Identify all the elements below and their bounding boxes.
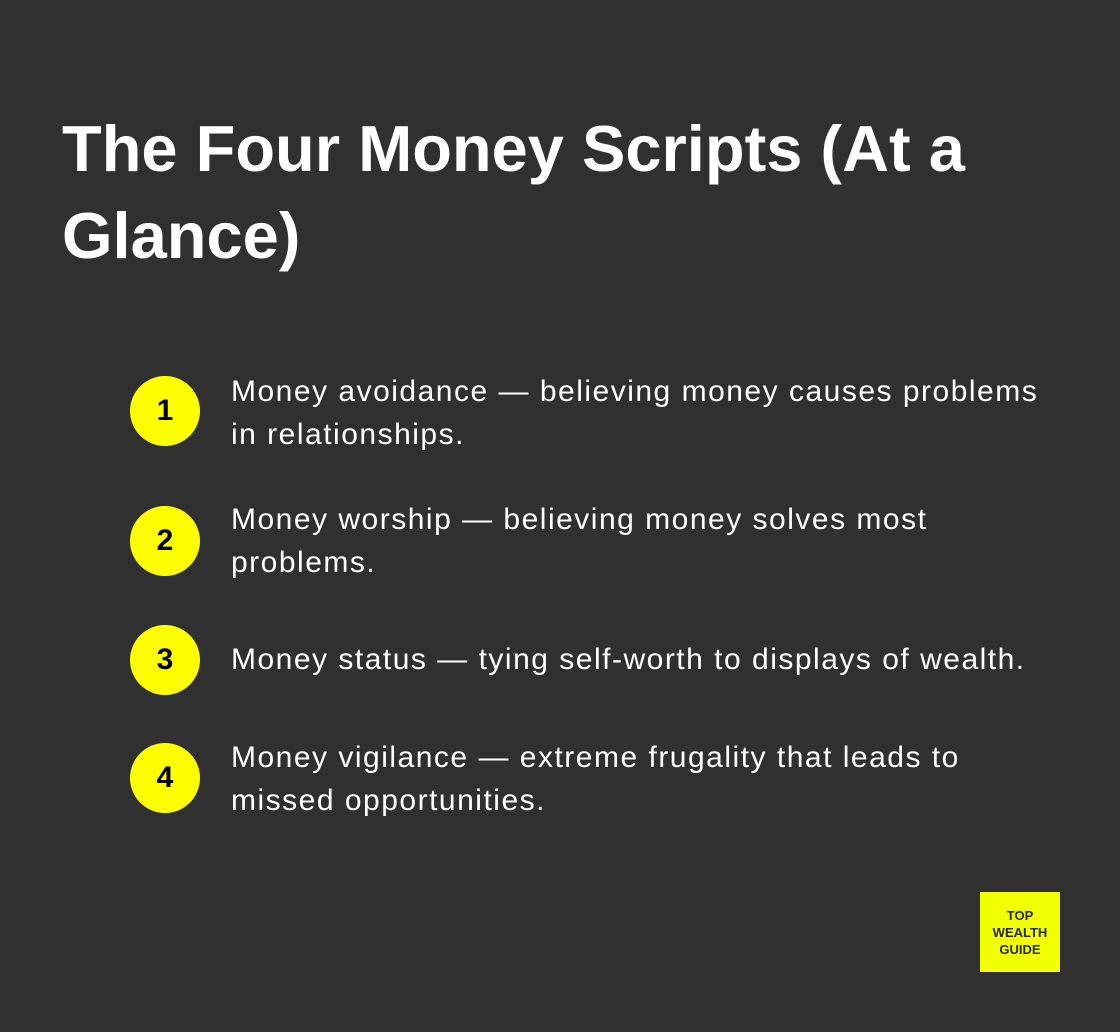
number badge 3 bbox=[130, 625, 200, 695]
number badge 2 bbox=[130, 506, 200, 576]
logo: Top Wealth Guide: WEALTH bbox=[993, 925, 1047, 940]
title bbox=[62, 112, 966, 272]
text 2: problems. bbox=[231, 546, 376, 579]
logo: Top Wealth Guide bbox=[980, 892, 1060, 972]
logo: Top Wealth Guide: TOP bbox=[1007, 908, 1033, 923]
number badge 4: 4 bbox=[157, 761, 173, 794]
text 2: Money worship — believing money solves most bbox=[231, 503, 927, 536]
title: The Four Money Scripts (At a bbox=[62, 112, 965, 185]
text 4: missed opportunities. bbox=[231, 784, 546, 817]
text 1: in relationships. bbox=[231, 418, 465, 451]
title: Glance) bbox=[62, 199, 300, 272]
number badge 1 bbox=[130, 376, 200, 446]
text 4: Money vigilance — extreme frugality that leads to bbox=[231, 741, 960, 774]
text 2 bbox=[231, 503, 927, 579]
item 4 bbox=[130, 741, 960, 817]
number badge 4 bbox=[130, 743, 200, 813]
number badge 1: 1 bbox=[157, 394, 173, 427]
list bbox=[130, 375, 1038, 817]
item 1 bbox=[130, 375, 1038, 451]
text 4 bbox=[231, 741, 960, 817]
text 1 bbox=[231, 375, 1038, 451]
item 2 bbox=[130, 503, 927, 579]
text 3: Money status — tying self-worth to displays of wealth. bbox=[231, 643, 1026, 676]
number badge 2: 2 bbox=[157, 524, 173, 557]
number badge 3: 3 bbox=[157, 643, 173, 676]
text 1: Money avoidance — believing money causes problems bbox=[231, 375, 1038, 408]
item 3 bbox=[130, 625, 1026, 695]
logo: Top Wealth Guide: GUIDE bbox=[999, 942, 1041, 957]
